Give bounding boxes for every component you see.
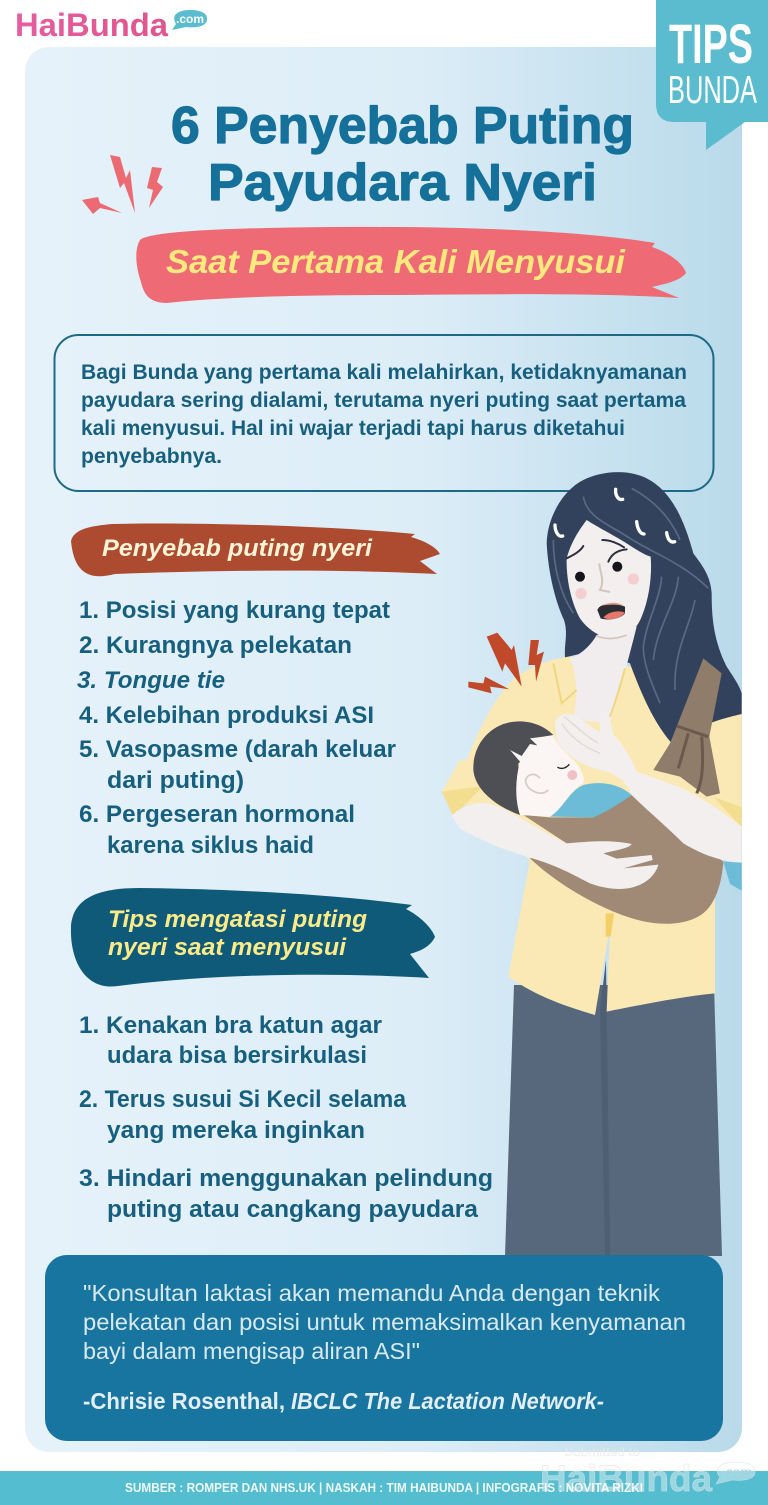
watermark: submitted to HaiBunda <box>540 1447 755 1499</box>
watermark: submitted to HaiBunda: HaiBunda <box>540 1458 712 1499</box>
list: tips: 3. Hindari menggunakan pelindung <box>79 1165 493 1192</box>
baby hair <box>473 721 553 815</box>
intro text box: kali menyusui. Hal ini wajar terjadi tapi harus diketahui <box>81 416 625 440</box>
lower body group <box>442 721 742 937</box>
list: tips: 2. Terus susui Si Kecil selama <box>79 1086 407 1113</box>
supporting arm and hand <box>452 803 658 889</box>
quote box: IBCLC The Lactation Network- <box>291 1388 604 1414</box>
list: tips <box>79 1012 493 1223</box>
title: Payudara Nyeri <box>208 154 597 212</box>
red pain bolts <box>468 633 544 693</box>
footer bar: SUMBER : ROMPER DAN NHS.UK | NASKAH : TIM HAIBUNDA | INFOGRAFIS : NOVITA RIZKI <box>125 1480 643 1495</box>
collar lines <box>553 663 625 717</box>
list: causes: 2. Kurangnya pelekatan <box>79 632 352 659</box>
blanket <box>550 783 632 817</box>
list: causes: 5. Vasopasme (darah keluar <box>79 736 396 763</box>
sleeve ties <box>677 726 708 793</box>
list: causes: 3. Tongue tie <box>77 667 225 694</box>
list: causes: 1. Posisi yang kurang tepat <box>79 597 390 624</box>
intro text box: Bagi Bunda yang pertama kali melahirkan, ketidaknyamanan <box>81 360 687 384</box>
subtitle banner <box>136 227 686 303</box>
blue cuff <box>723 862 742 891</box>
quote box: -Chrisie Rosenthal, <box>83 1388 285 1414</box>
title <box>171 97 634 212</box>
list: tips: 1. Kenakan bra katun agar <box>79 1012 382 1039</box>
intro text box <box>54 335 714 491</box>
shirt placket <box>606 913 614 937</box>
sleeve <box>653 658 722 797</box>
list: causes: dari puting) <box>107 767 244 794</box>
list: tips: udara bisa bersirkulasi <box>107 1042 367 1069</box>
logo: HaiBunda: HaiBunda <box>15 7 168 43</box>
list: tips: yang mereka inginkan <box>107 1117 365 1144</box>
icon: pink pain bolts <box>82 155 163 214</box>
list: tips: puting atau cangkang payudara <box>107 1196 479 1223</box>
list: causes: karena siklus haid <box>107 832 314 859</box>
nursing hand and forearm <box>555 711 742 863</box>
illustration: mother nursing baby <box>442 472 742 1256</box>
heading: tips <box>71 888 435 987</box>
logo: HaiBunda: .com <box>176 12 204 26</box>
watermark: submitted to HaiBunda: .com <box>722 1465 752 1479</box>
hair <box>547 472 742 745</box>
list: causes <box>77 597 396 859</box>
list: causes: 4. Kelebihan produksi ASI <box>79 702 374 729</box>
intro text box: payudara sering dialami, terutama nyeri puting saat pertama <box>81 388 687 412</box>
watermark: submitted to HaiBunda: Submitted to <box>564 1447 640 1459</box>
face details <box>567 540 639 639</box>
quote box: bayi dalam mengisap aliran ASI" <box>83 1338 420 1364</box>
finger lines <box>562 717 600 753</box>
baby face <box>510 735 584 817</box>
neck and chest <box>570 627 637 723</box>
quote box: "Konsultan laktasi akan memandu Anda dengan teknik <box>83 1280 661 1306</box>
legs <box>505 960 722 1256</box>
list: causes: 6. Pergeseran hormonal <box>79 801 355 828</box>
quote box <box>45 1255 723 1441</box>
badge: Tips Bunda <box>656 0 768 150</box>
heading: causes: Penyebab puting nyeri <box>102 535 373 562</box>
subtitle banner: Saat Pertama Kali Menyusui <box>166 243 626 280</box>
heading: tips: nyeri saat menyusui <box>108 934 347 961</box>
footer bar <box>0 1471 768 1505</box>
sling <box>523 795 723 924</box>
baby details <box>526 764 577 793</box>
shirt cuffs <box>442 786 481 815</box>
heading: tips: Tips mengatasi puting <box>108 906 367 933</box>
quote box: pelekatan dan posisi untuk memaksimalkan kenyamanan <box>83 1309 686 1335</box>
intro text box: penyebabnya. <box>81 444 222 468</box>
shirt <box>442 657 742 1015</box>
title: 6 Penyebab Puting <box>171 97 634 155</box>
face <box>567 520 651 638</box>
heading: causes <box>71 523 440 576</box>
hair strands and highlights <box>553 488 708 703</box>
